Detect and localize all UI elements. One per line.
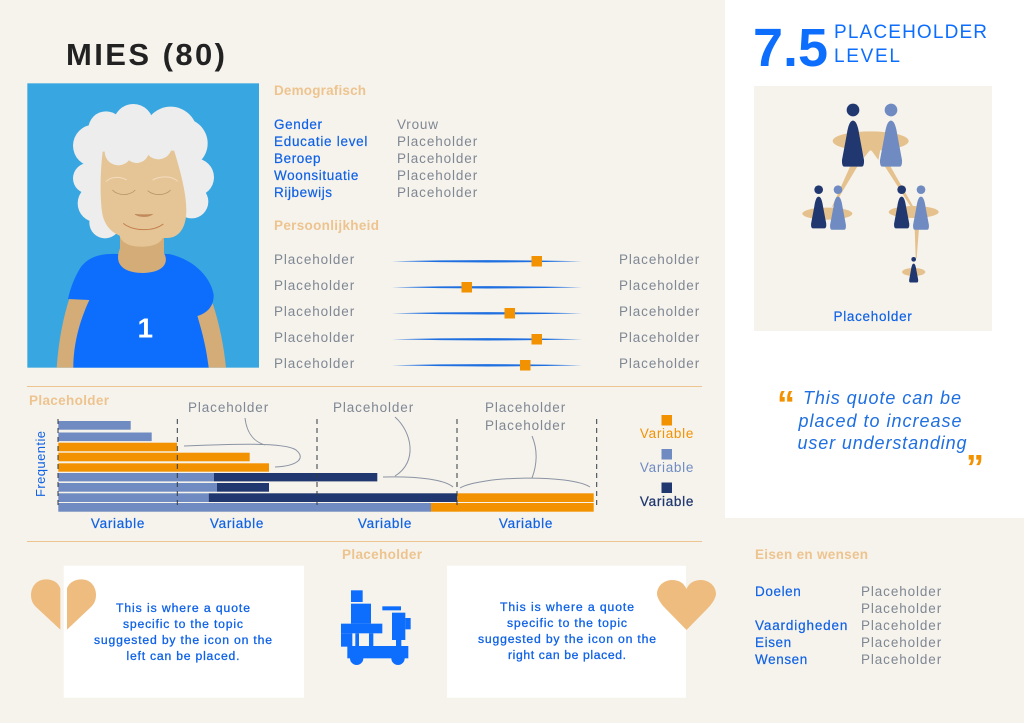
family tree caption: Placeholder bbox=[834, 309, 912, 324]
demographic values bbox=[397, 117, 478, 200]
requirement values: Placeholder bbox=[861, 635, 942, 650]
pull quote bbox=[777, 383, 984, 488]
requirement keys: Wensen bbox=[755, 652, 808, 667]
slider row 3: Placeholder bbox=[619, 304, 700, 319]
requirement keys: Doelen bbox=[755, 584, 801, 599]
slider row 4 bbox=[274, 330, 700, 345]
slider row 3 bbox=[274, 304, 700, 319]
heading: persoonlijkheid: Persoonlijkheid bbox=[274, 218, 379, 233]
annotation 2 with bracket: Placeholder bbox=[333, 400, 414, 415]
heading: chart: Placeholder bbox=[29, 393, 110, 408]
level score: PLACEHOLDER bbox=[834, 22, 987, 43]
slider row 5: Placeholder bbox=[619, 356, 700, 371]
demographic values: Placeholder bbox=[397, 185, 478, 200]
panel: right white column bbox=[725, 0, 1024, 518]
demographic values: Placeholder bbox=[397, 134, 478, 149]
requirement keys: Vaardigheden bbox=[755, 618, 848, 633]
demographic keys bbox=[274, 117, 368, 200]
slider row 5 bbox=[274, 356, 700, 371]
legend: Variable bbox=[640, 460, 694, 475]
quote card left: left can be placed. bbox=[126, 649, 240, 663]
icon: mobility scooter bbox=[341, 590, 411, 665]
x axis labels: Variable bbox=[358, 516, 412, 531]
section: quotes bbox=[31, 547, 716, 698]
quote card left: specific to the topic bbox=[123, 617, 243, 631]
slider row 2: Placeholder bbox=[274, 278, 355, 293]
icon: whole heart bbox=[657, 580, 716, 630]
requirement values: Placeholder bbox=[861, 652, 942, 667]
section: demografisch bbox=[274, 83, 478, 200]
x axis labels: Variable bbox=[210, 516, 264, 531]
icon: broken heart bbox=[31, 579, 96, 630]
annotation 2 with bracket bbox=[333, 400, 453, 487]
demographic values: Placeholder bbox=[397, 151, 478, 166]
demographic keys: Beroep bbox=[274, 151, 321, 166]
quote card left: This is where a quote bbox=[116, 601, 250, 615]
slider row 3: Placeholder bbox=[274, 304, 355, 319]
demographic values: Vrouw bbox=[397, 117, 439, 132]
quote card left: suggested by the icon on the bbox=[94, 633, 272, 647]
x axis labels: Variable bbox=[91, 516, 145, 531]
slider row 4: Placeholder bbox=[619, 330, 700, 345]
requirement values: Placeholder bbox=[861, 601, 942, 616]
family tree diagram bbox=[802, 104, 939, 283]
heading: quotes: Placeholder bbox=[342, 547, 423, 562]
quote card right: suggested by the icon on the bbox=[478, 632, 656, 646]
demographic keys: Gender bbox=[274, 117, 323, 132]
level score bbox=[753, 18, 987, 78]
slider row 1: Placeholder bbox=[619, 252, 700, 267]
annotation 3 with bracket: Placeholder bbox=[485, 418, 566, 433]
quote card right: specific to the topic bbox=[507, 616, 627, 630]
level score: 7.5 bbox=[753, 18, 828, 78]
panel: family tree bbox=[754, 86, 992, 331]
opening quote mark: “ bbox=[777, 383, 795, 424]
quote card right bbox=[447, 566, 686, 698]
pull quote: This quote can be bbox=[803, 388, 961, 408]
annotation 1 with bracket bbox=[184, 400, 300, 467]
x axis labels: Variable bbox=[499, 516, 553, 531]
requirement values: Placeholder bbox=[861, 584, 942, 599]
slider row 1: Placeholder bbox=[274, 252, 355, 267]
requirement values bbox=[861, 584, 942, 667]
demographic values: Placeholder bbox=[397, 168, 478, 183]
requirement keys: Eisen bbox=[755, 635, 792, 650]
slider row 4: Placeholder bbox=[274, 330, 355, 345]
requirement values: Placeholder bbox=[861, 618, 942, 633]
annotation 3 with bracket: Placeholder bbox=[485, 400, 566, 415]
dashed gridlines bbox=[58, 419, 597, 505]
demographic keys: Rijbewijs bbox=[274, 185, 333, 200]
pull quote: user understanding bbox=[798, 433, 966, 453]
slider row 2 bbox=[274, 278, 700, 293]
section: frequency chart bbox=[29, 393, 694, 531]
quote card right: right can be placed. bbox=[508, 648, 626, 662]
demographic keys: Educatie level bbox=[274, 134, 368, 149]
legend: Variable bbox=[640, 426, 694, 441]
quote card right: This is where a quote bbox=[500, 600, 634, 614]
slider row 5: Placeholder bbox=[274, 356, 355, 371]
stacked horizontal bars bbox=[58, 421, 594, 512]
portrait illustration: 1 bbox=[138, 312, 153, 343]
demographic keys: Woonsituatie bbox=[274, 168, 359, 183]
section: persoonlijkheid bbox=[274, 218, 700, 371]
title: MIES (80) bbox=[66, 37, 225, 72]
closing quote mark: ” bbox=[966, 447, 984, 488]
heading: demografisch: Demografisch bbox=[274, 83, 366, 98]
slider row 2: Placeholder bbox=[619, 278, 700, 293]
level score: LEVEL bbox=[834, 46, 900, 67]
heading: eisen en wensen: Eisen en wensen bbox=[755, 547, 868, 562]
slider row 1 bbox=[274, 252, 700, 267]
quote card left bbox=[64, 566, 304, 698]
section: eisen en wensen bbox=[755, 547, 942, 667]
legend bbox=[640, 415, 694, 509]
legend: Variable bbox=[640, 494, 694, 509]
requirement keys bbox=[755, 584, 848, 667]
annotation 3 with bracket bbox=[460, 400, 590, 488]
x axis labels bbox=[91, 516, 553, 531]
portrait illustration bbox=[27, 83, 259, 368]
pull quote: placed to increase bbox=[798, 411, 962, 431]
annotation 1 with bracket: Placeholder bbox=[188, 400, 269, 415]
axis label: frequentie: Frequentie bbox=[33, 431, 48, 497]
